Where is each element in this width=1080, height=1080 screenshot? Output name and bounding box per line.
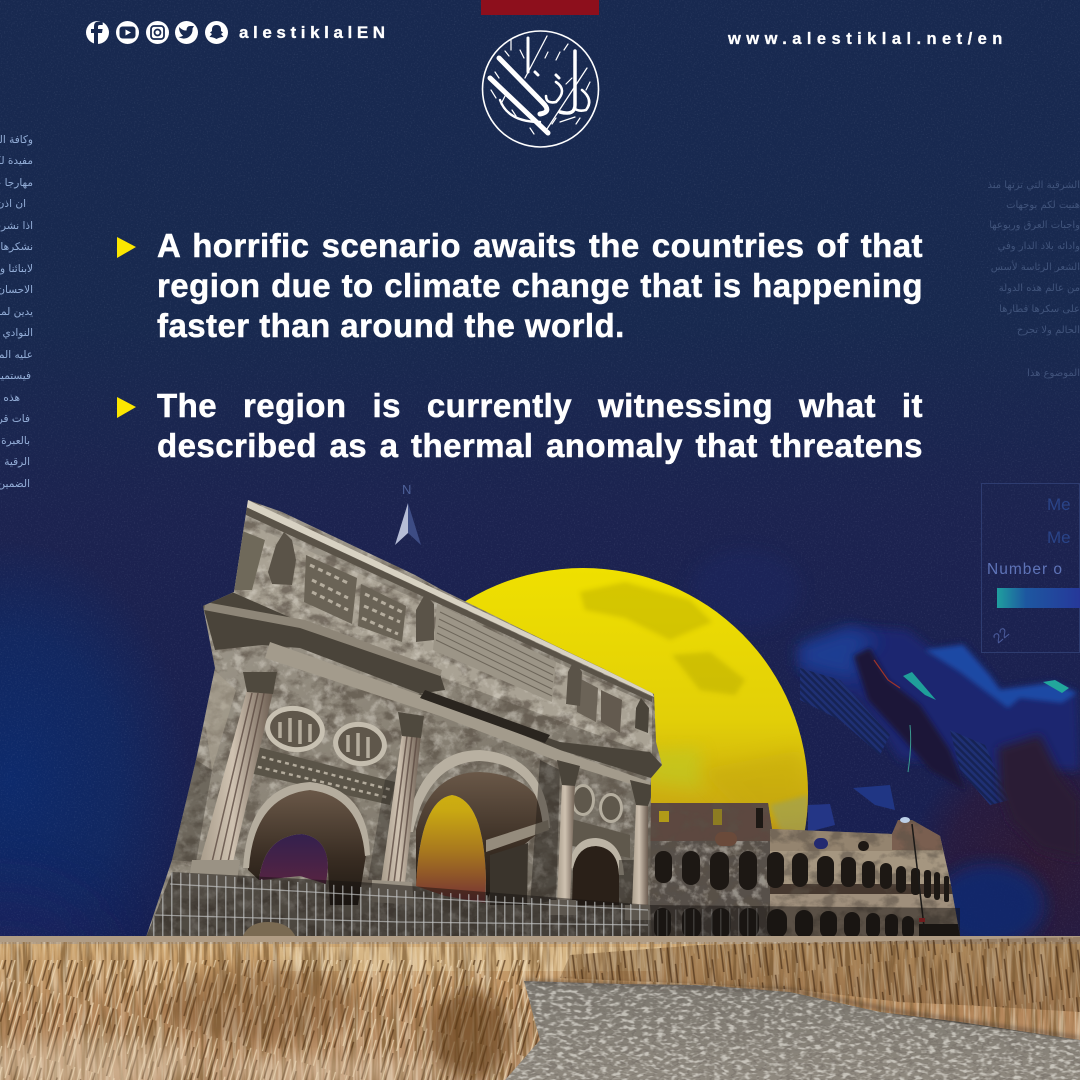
attic storey xyxy=(230,520,652,755)
right margin arabic text: الشرقية التي تزتها منذ xyxy=(988,180,1080,191)
left margin arabic text xyxy=(0,134,33,490)
yellow sun xyxy=(416,568,808,903)
arch of constantine xyxy=(145,500,665,940)
inscription block xyxy=(433,604,556,702)
top moulding xyxy=(246,500,654,697)
second bullet text: The region is currently witnessing what it xyxy=(157,387,923,424)
social icons xyxy=(86,21,228,44)
handle: alestiklalEN xyxy=(239,23,390,42)
right small arch xyxy=(572,846,619,905)
shaded grass clumps xyxy=(165,967,355,1043)
second bullet text xyxy=(157,387,923,464)
logo emblem xyxy=(482,31,598,147)
compass north marker: N xyxy=(402,482,411,497)
cracked earth xyxy=(500,978,1080,1080)
iron fence xyxy=(145,872,960,940)
faint legend panel: Me xyxy=(1047,528,1071,547)
faint legend panel: 22 xyxy=(990,624,1012,646)
darker reed band on right xyxy=(560,937,1080,1012)
column plinths xyxy=(188,860,240,888)
statues xyxy=(268,532,296,585)
right margin arabic text: الشعر الرئاسة لأسس xyxy=(991,260,1080,273)
right margin arabic text: الحالم ولا تجرح xyxy=(1017,325,1080,336)
centre arch with vault xyxy=(416,772,548,903)
first bullet text: region due to climate change that is happening xyxy=(157,267,923,304)
compass north marker xyxy=(395,482,421,545)
arch windows xyxy=(654,808,960,938)
first bullet text: A horrific scenario awaits the countries of that xyxy=(157,227,923,264)
right margin arabic text: هنيت لكم بوجهات xyxy=(1006,200,1080,211)
faint legend panel: Me xyxy=(1047,495,1071,514)
first bullet text xyxy=(157,227,923,344)
diagonal straw strands xyxy=(0,960,540,1080)
medallions xyxy=(265,706,325,752)
website url: www.alestiklal.net/en xyxy=(727,30,1008,48)
faint legend panel xyxy=(982,484,1080,652)
left margin arabic text: النوادي xyxy=(2,327,33,339)
red top tab xyxy=(481,0,599,15)
columns xyxy=(200,690,273,862)
right margin arabic text: على سكرها قطارها xyxy=(999,304,1080,315)
attic relief panels xyxy=(304,555,357,624)
shadows xyxy=(530,760,560,905)
second bullet text: described as a thermal anomaly that threatens xyxy=(157,427,923,464)
right margin arabic text xyxy=(988,180,1080,379)
dry grass and cracked earth ground xyxy=(0,936,1080,1080)
left margin arabic text: نشكرها xyxy=(0,241,33,253)
faint legend panel: Number o xyxy=(987,561,1063,578)
map of the mediterranean xyxy=(690,550,1080,947)
bullet triangles xyxy=(117,237,136,418)
main cornice xyxy=(203,592,662,778)
colosseum xyxy=(648,803,960,938)
right margin arabic text: واجبات العرق وربوعها xyxy=(989,220,1080,231)
right margin arabic text: وادائه بلاد الدار وفي xyxy=(998,241,1080,252)
right margin arabic text: من عالم هذه الدولة xyxy=(999,283,1080,294)
left arch with vault xyxy=(248,790,366,905)
left margin arabic text: لابنائنا و xyxy=(0,263,33,275)
spandrel and medallion band xyxy=(245,745,395,805)
first bullet text: faster than around the world. xyxy=(157,307,625,344)
column capitals xyxy=(243,672,277,694)
stone weathering texture xyxy=(145,500,665,940)
far left pier xyxy=(204,670,236,770)
maroon sky in left arch opening xyxy=(255,826,335,890)
right margin arabic text: الموضوع هذا xyxy=(1027,368,1080,379)
